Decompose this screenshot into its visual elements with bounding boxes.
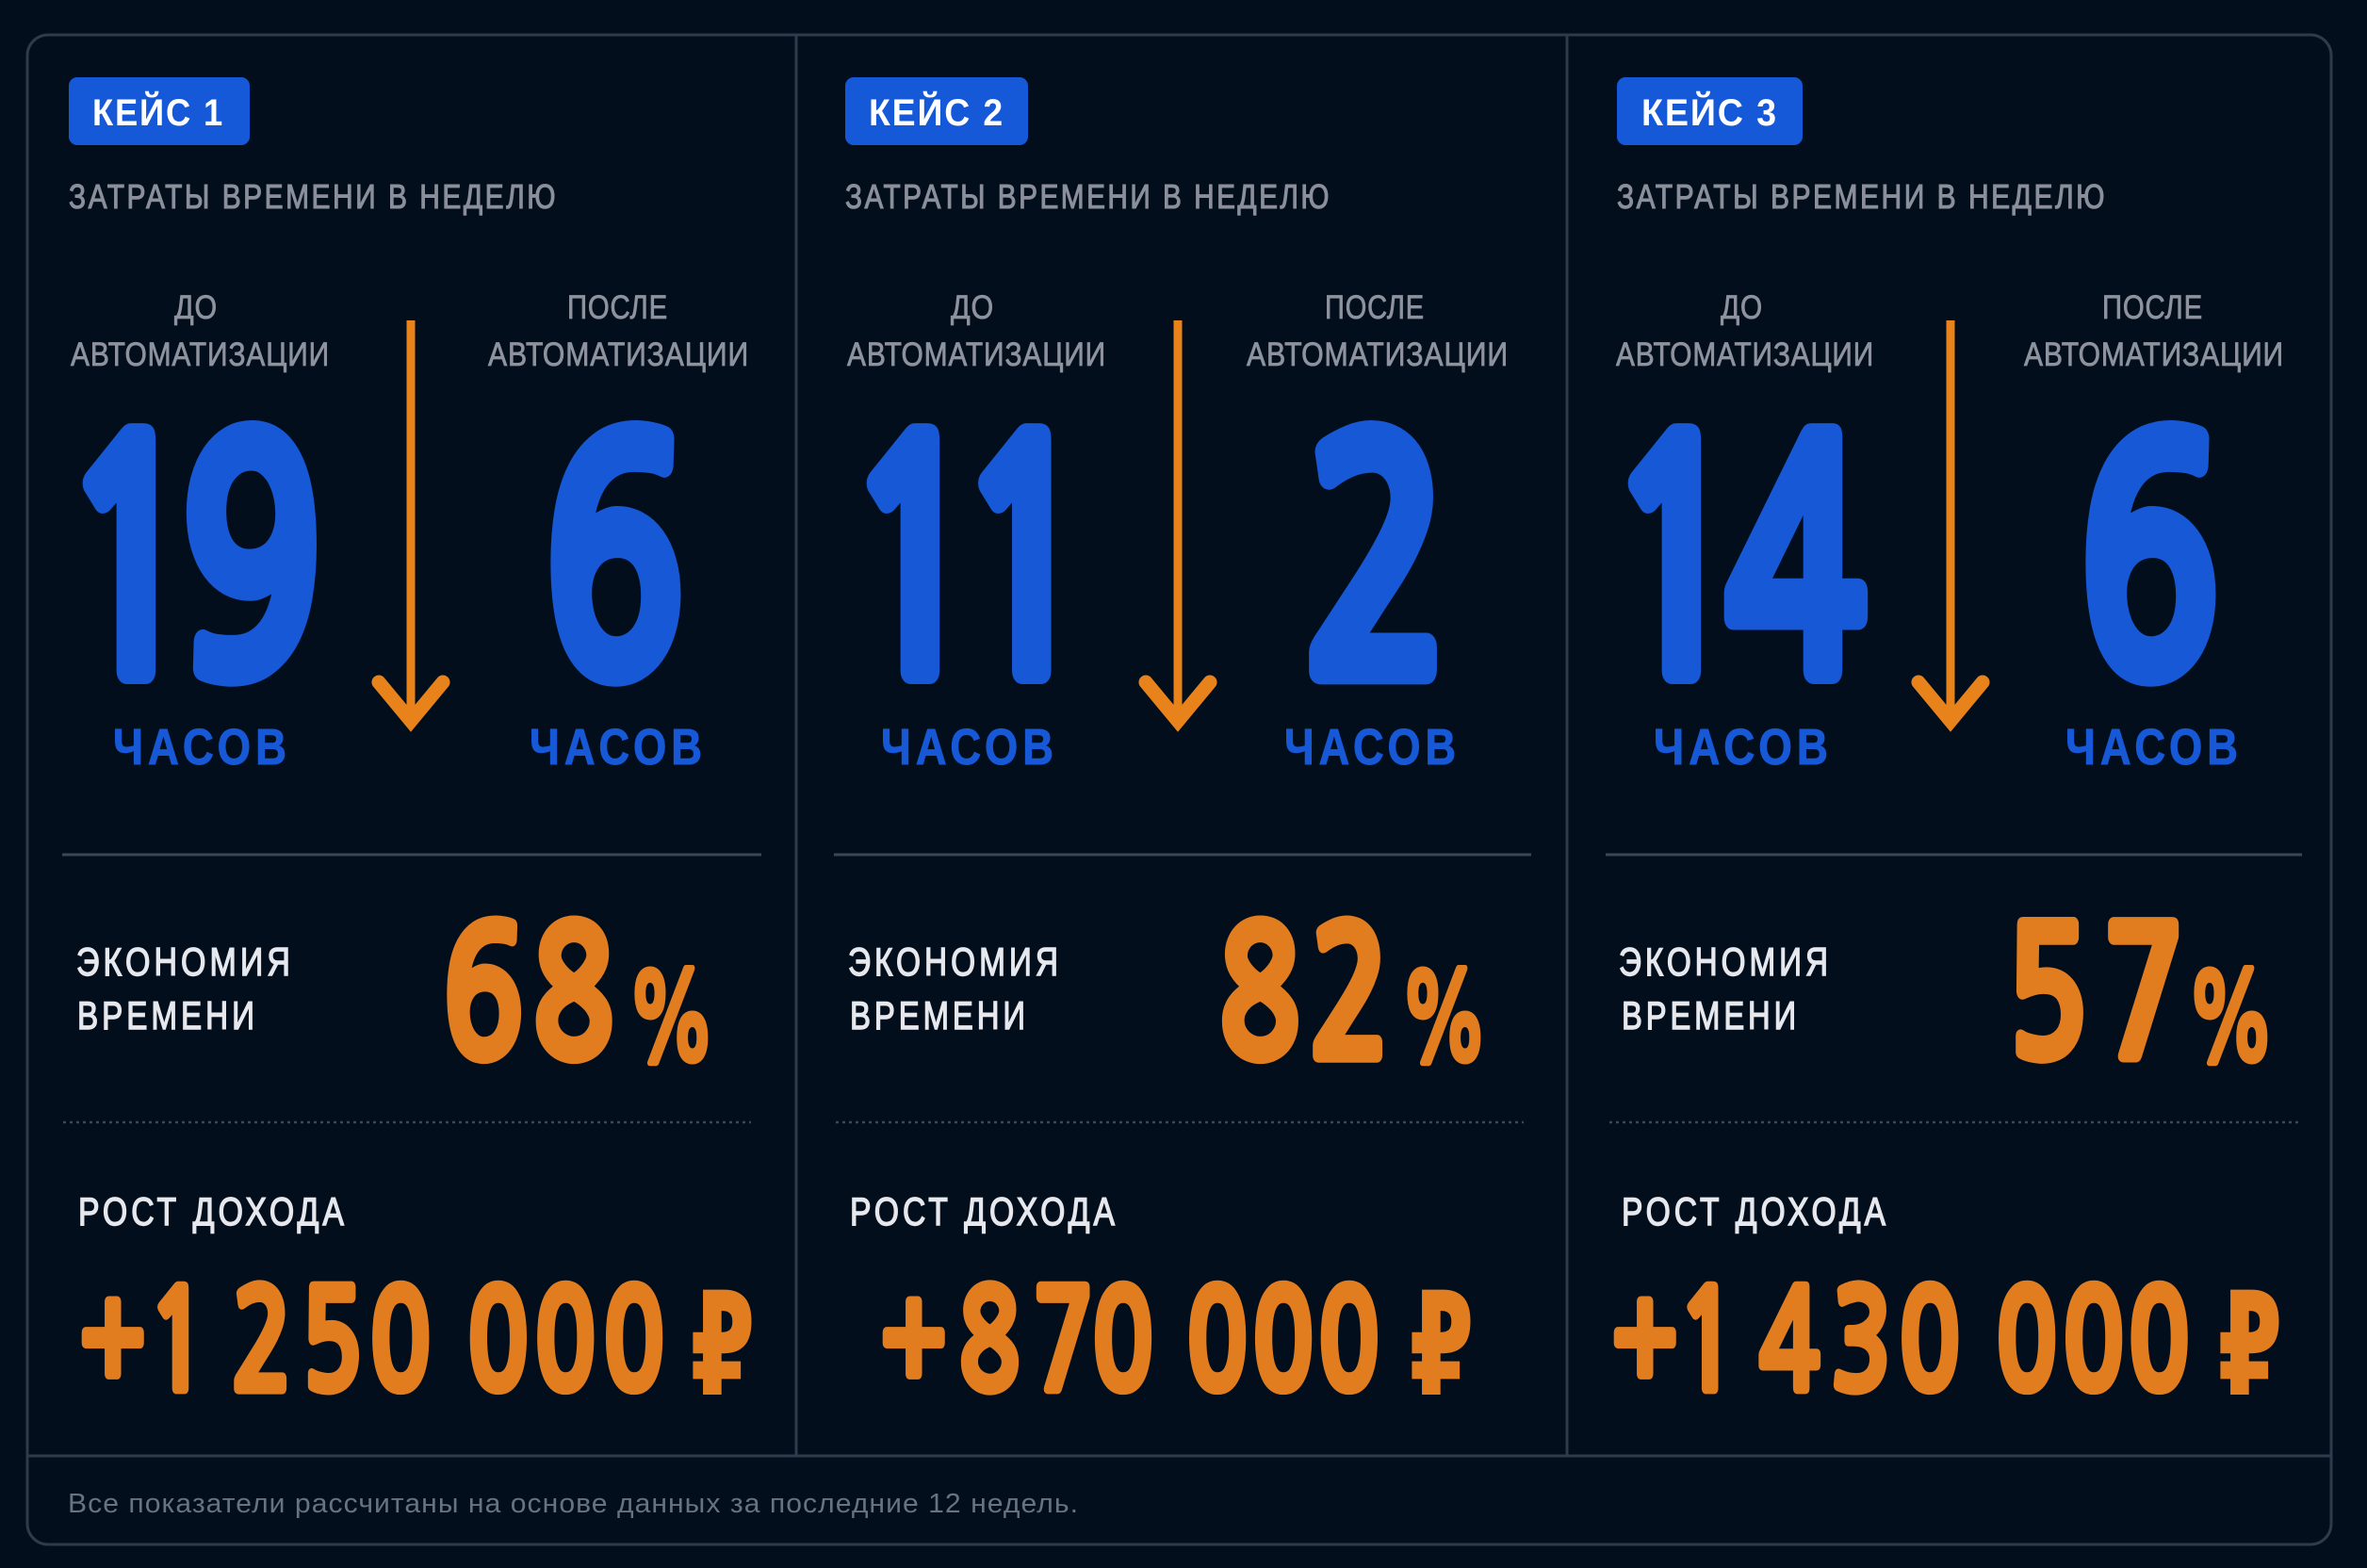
unit before: ЧАСОВ xyxy=(881,719,1058,776)
hours after: 6 xyxy=(2078,407,2221,722)
before label: ДО xyxy=(174,289,218,326)
after label: ПОСЛЕ xyxy=(2102,289,2203,326)
panel: case 3 xyxy=(1605,77,2302,1424)
before label xyxy=(71,289,330,373)
income label: РОСТ ДОХОДА xyxy=(850,1189,1118,1233)
savings value: 82 xyxy=(1218,907,1391,1085)
arrow down xyxy=(1918,320,1983,721)
panel: case 2 xyxy=(834,77,1531,1424)
after label xyxy=(1247,289,1509,373)
badge: case 1: КЕЙС 1 xyxy=(92,90,224,134)
savings value xyxy=(1218,907,1489,1085)
savings label: ВРЕМЕНИ xyxy=(77,993,258,1037)
savings label xyxy=(76,939,294,1037)
badge: case 2 xyxy=(845,77,1028,145)
before label xyxy=(847,289,1106,373)
panel: case 1 xyxy=(59,77,761,1424)
arrow down xyxy=(379,320,443,721)
income label: РОСТ ДОХОДА xyxy=(1622,1189,1889,1233)
after label: АВТОМАТИЗАЦИИ xyxy=(2024,336,2284,373)
subtitle: ЗАТРАТЫ ВРЕМЕНИ В НЕДЕЛЮ xyxy=(69,177,558,216)
before label: АВТОМАТИЗАЦИИ xyxy=(71,336,330,373)
income value: ₽ xyxy=(2218,1266,2282,1424)
income value: +870 000 xyxy=(880,1274,1379,1412)
hours after: 2 xyxy=(1302,407,1452,722)
arrow down xyxy=(1146,320,1210,721)
before label xyxy=(1616,289,1874,373)
badge: case 3 xyxy=(1617,77,1803,145)
after label xyxy=(2024,289,2284,373)
savings value: % xyxy=(1399,962,1489,1081)
income value: ₽ xyxy=(1410,1266,1474,1424)
after label: АВТОМАТИЗАЦИИ xyxy=(488,336,749,373)
subtitle: ЗАТРАТЫ ВРЕМЕНИ В НЕДЕЛЮ xyxy=(1617,177,2107,216)
unit after: ЧАСОВ xyxy=(530,719,707,776)
hours before: 14 xyxy=(1605,407,1868,722)
hours after: 6 xyxy=(543,407,686,722)
badge: case 1 xyxy=(69,77,250,145)
savings label xyxy=(848,939,1062,1037)
income label: РОСТ ДОХОДА xyxy=(78,1189,348,1233)
before label: АВТОМАТИЗАЦИИ xyxy=(1616,336,1874,373)
subtitle: ЗАТРАТЫ ВРЕМЕНИ В НЕДЕЛЮ xyxy=(845,177,1331,216)
savings label xyxy=(1619,939,1832,1037)
badge: case 3: КЕЙС 3 xyxy=(1641,90,1778,134)
hours before: 19 xyxy=(59,407,323,722)
savings value: % xyxy=(627,962,716,1081)
income value: +1 430 000 xyxy=(1611,1274,2190,1412)
unit after: ЧАСОВ xyxy=(1284,719,1461,776)
income value: +1 250 000 xyxy=(79,1274,665,1412)
income value: ₽ xyxy=(691,1266,755,1424)
before label: ДО xyxy=(951,289,994,326)
after label xyxy=(488,289,749,373)
savings value xyxy=(2006,907,2276,1085)
unit before: ЧАСОВ xyxy=(113,719,291,776)
before label: ДО xyxy=(1721,289,1763,326)
after label: ПОСЛЕ xyxy=(567,289,668,326)
savings value: % xyxy=(2186,962,2276,1081)
footnote: Все показатели рассчитаны на основе данных за последние 12 недель. xyxy=(68,1489,1079,1519)
badge: case 2: КЕЙС 2 xyxy=(869,90,1004,134)
hours before: 11 xyxy=(843,407,1098,722)
before label: АВТОМАТИЗАЦИИ xyxy=(847,336,1106,373)
savings label: ЭКОНОМИЯ xyxy=(1619,939,1832,984)
after label: ПОСЛЕ xyxy=(1325,289,1425,326)
after label: АВТОМАТИЗАЦИИ xyxy=(1247,336,1509,373)
savings label: ЭКОНОМИЯ xyxy=(76,939,294,984)
savings label: ВРЕМЕНИ xyxy=(850,993,1029,1037)
savings value: 68 xyxy=(442,907,614,1085)
savings label: ВРЕМЕНИ xyxy=(1622,993,1800,1037)
savings value: 57 xyxy=(2006,907,2185,1085)
unit before: ЧАСОВ xyxy=(1654,719,1833,776)
savings value xyxy=(442,907,716,1085)
savings label: ЭКОНОМИЯ xyxy=(848,939,1062,984)
unit after: ЧАСОВ xyxy=(2065,719,2243,776)
